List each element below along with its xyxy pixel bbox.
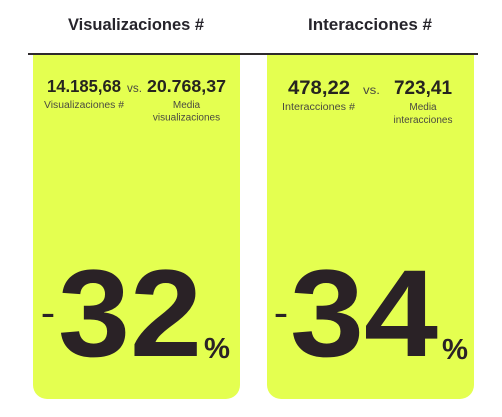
big value: -32%: -: [41, 298, 55, 328]
left comparison: Visualizaciones #: [44, 100, 124, 111]
big value: -32%: %: [204, 333, 230, 365]
right comparison: 478,22: [288, 78, 350, 99]
right comparison: Media: [409, 102, 437, 113]
right comparison: [282, 78, 452, 126]
left comparison: 20.768,37: [147, 76, 226, 96]
big value: -34%: 34: [290, 245, 438, 383]
heading: Visualizaciones: Visualizaciones #: [68, 16, 204, 34]
heading: Interacciones: Interacciones #: [308, 16, 432, 34]
right comparison: Interacciones #: [282, 102, 355, 113]
big value: -32%: 32: [58, 245, 202, 383]
left comparison: 14.185,68: [47, 76, 121, 96]
right comparison: vs.: [363, 83, 380, 97]
left comparison: Media: [173, 100, 201, 111]
right comparison: interacciones: [394, 115, 452, 126]
big value: -34%: %: [442, 334, 468, 366]
panel: right: [267, 55, 474, 399]
left comparison: [44, 76, 226, 124]
panel: left: [33, 55, 240, 399]
right comparison: 723,41: [394, 78, 452, 99]
left comparison: vs.: [127, 81, 142, 95]
big value: -34%: -: [274, 298, 288, 328]
left comparison: visualizaciones: [153, 112, 220, 124]
